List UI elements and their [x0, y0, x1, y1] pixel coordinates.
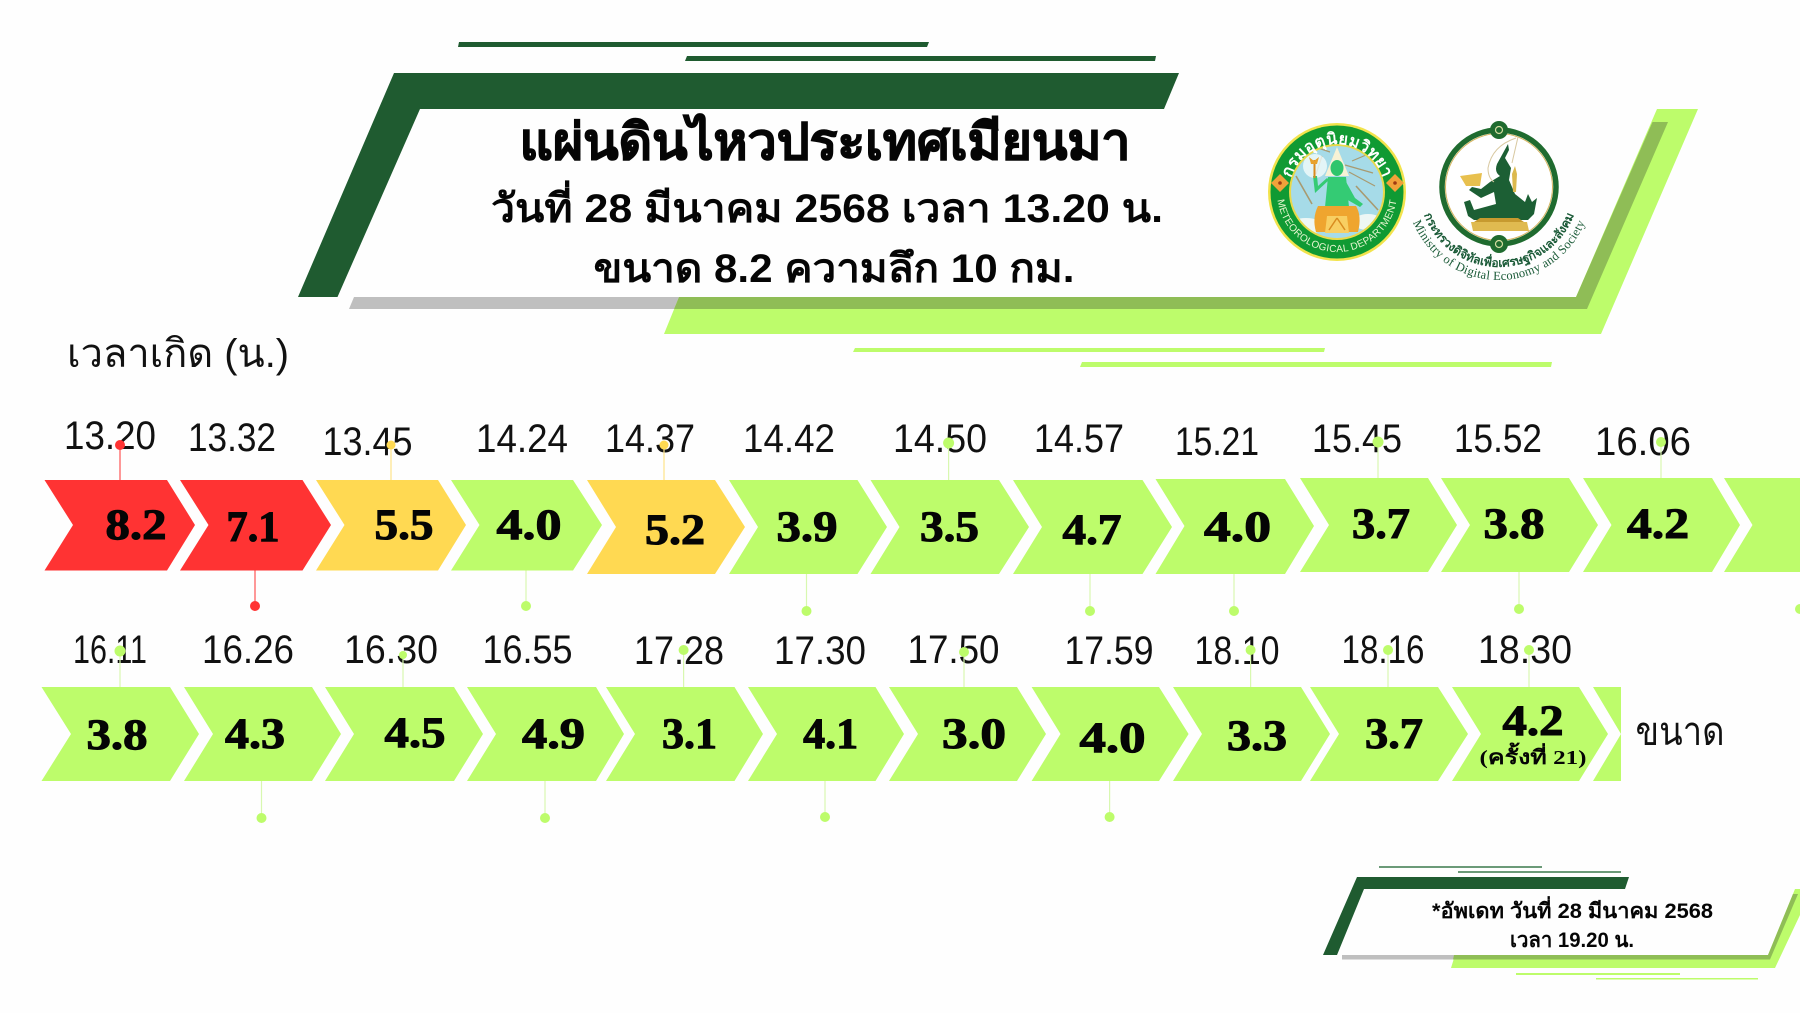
chevron 3.8 — [1441, 478, 1598, 572]
chevron 8.2 — [44, 480, 195, 570]
marker 13.32: 13.32 — [188, 416, 276, 460]
marker 14.50 — [893, 417, 987, 480]
arc text Thai: กรมอุตุนิยมวิทยา — [1284, 131, 1390, 177]
rosettes — [1271, 174, 1404, 192]
chevron 4.3: 4.3 — [225, 711, 285, 758]
chevron 3.3 — [1173, 687, 1330, 781]
marker 16.11: 16.11 — [73, 628, 147, 672]
axis label: time of occurrence: เวลาเกิด (น.) — [67, 332, 289, 376]
marker 14.42: 14.42 — [743, 417, 835, 461]
marker 14.24 — [476, 417, 568, 611]
arc text Thai: กระทรวงดิจิทัลเพื่อเศรษฐกิจและสังคม — [1424, 213, 1574, 268]
logo: Meteorological Department — [1268, 123, 1406, 261]
axis label: magnitude: ขนาด — [1636, 710, 1724, 754]
marker 17.59 — [1064, 629, 1154, 822]
chevron 3.5: 3.5 — [920, 504, 979, 551]
chevron 4.7 — [1013, 480, 1172, 574]
chevron 4.5 — [325, 687, 483, 781]
chevron 3.5 — [870, 480, 1029, 574]
marker 17.59: 17.59 — [1064, 629, 1154, 673]
arc text English: Ministry of Digital Economy and Society — [1412, 219, 1586, 280]
sky rays and clouds — [1295, 148, 1378, 233]
marker 16.26 — [202, 628, 294, 823]
footer light lines — [1516, 973, 1758, 980]
logo: Ministry of Digital Economy and Society — [1412, 121, 1586, 280]
chevron 4.2 final event: 4.2 — [1502, 698, 1564, 745]
marker 17.28: 17.28 — [634, 629, 724, 673]
chevron 4.2 — [1583, 478, 1740, 572]
chevron 3.1: 3.1 — [662, 711, 717, 758]
chevron 3.9: 3.9 — [776, 504, 838, 551]
chevron 5.5: 5.5 — [374, 502, 434, 549]
header banner — [298, 42, 1698, 367]
marker 13.45 — [322, 420, 412, 480]
marker 14.37 — [605, 417, 695, 480]
chevron 3.0: 3.0 — [942, 711, 1006, 758]
chevron 4.2 final event — [1452, 687, 1608, 781]
marker 18.10: 18.10 — [1194, 629, 1280, 673]
chevron 3.7: 3.7 — [1352, 501, 1410, 548]
chevron 3.8 — [42, 687, 199, 781]
subtitle magnitude and depth: ขนาด 8.2 ความลึก 10 กม. — [594, 247, 1074, 291]
title: แผ่นดินไหวประเทศเมียนมา — [520, 113, 1130, 170]
marker 13.20: 13.20 — [64, 414, 156, 458]
chevron 4.9: 4.9 — [522, 711, 585, 758]
marker 17.50: 17.50 — [908, 628, 1000, 672]
chevron 3.7: 3.7 — [1365, 711, 1423, 758]
marker 13.20 — [64, 414, 156, 480]
marker 14.50: 14.50 — [893, 417, 987, 461]
marker 14.57: 14.57 — [1034, 417, 1124, 461]
marker 15.52 — [1454, 417, 1542, 614]
marker 15.45: 15.45 — [1312, 417, 1402, 461]
marker 18.16: 18.16 — [1342, 628, 1424, 672]
marker 18.10 — [1194, 629, 1280, 687]
marker 13.32 — [188, 416, 276, 611]
chevron 3.9 — [729, 480, 887, 574]
marker 16.55: 16.55 — [482, 628, 572, 672]
marker 16.55 — [482, 628, 572, 823]
lower light accent lines — [853, 348, 1552, 367]
dark green frame — [298, 73, 1179, 297]
update note — [1432, 895, 1713, 952]
chevron clipped continuation — [1724, 478, 1800, 614]
chevron 4.1: 4.1 — [803, 711, 858, 758]
arc text English: METEOROLOGICAL DEPARTMENT — [1278, 199, 1396, 252]
marker 15.21 — [1175, 420, 1259, 616]
chevron 3.8: 3.8 — [86, 712, 148, 759]
title — [491, 113, 1163, 291]
footer medium frame — [1453, 894, 1798, 960]
chevron 5.2 — [587, 480, 745, 574]
chevron 4.9 — [467, 687, 624, 781]
chevron 4.7: 4.7 — [1062, 507, 1122, 554]
chevron 3.0 — [889, 687, 1046, 781]
update note: เวลา 19.20 น. — [1510, 929, 1634, 952]
chevron 8.2: 8.2 — [106, 502, 166, 549]
chevron 4.0: 4.0 — [496, 502, 562, 549]
chevron 3.7 — [1310, 687, 1468, 781]
light green frame — [664, 109, 1698, 334]
marker 15.45 — [1312, 417, 1402, 478]
marker 16.30: 16.30 — [344, 628, 438, 672]
chevron 4.0: 4.0 — [1080, 715, 1146, 762]
chevron 7.1: 7.1 — [226, 504, 280, 551]
chevron end cap — [1593, 687, 1621, 781]
medium green frame — [674, 122, 1668, 309]
chevron 3.8: 3.8 — [1484, 501, 1544, 548]
ring knots — [1490, 121, 1508, 139]
marker 15.21: 15.21 — [1175, 420, 1259, 464]
chevron 3.1 — [606, 687, 763, 781]
chevron 4.2 final event: (ครั้งที่ 21) — [1480, 742, 1586, 769]
chevron 3.7 — [1300, 478, 1457, 572]
chevron 4.3 — [184, 687, 341, 781]
timeline row 1 — [44, 414, 1800, 616]
marker 16.11 — [73, 628, 147, 687]
update note: *อัพเดท วันที่ 28 มีนาคม 2568 — [1432, 895, 1713, 923]
marker 18.30: 18.30 — [1478, 628, 1572, 672]
grey bar — [349, 297, 679, 309]
marker 15.52: 15.52 — [1454, 417, 1542, 461]
chevron 5.5 — [316, 480, 466, 570]
footer update panel — [1323, 866, 1800, 980]
marker 17.30 — [774, 629, 866, 822]
chevron 4.0: 4.0 — [1204, 504, 1271, 551]
marker 17.30: 17.30 — [774, 629, 866, 673]
timeline row 2 — [42, 628, 1621, 823]
chevron 4.0 — [451, 480, 602, 570]
footer dark frame — [1323, 877, 1629, 955]
chevron 4.2: 4.2 — [1627, 501, 1689, 548]
footer grey bar — [1342, 955, 1455, 960]
marker 16.06: 16.06 — [1595, 420, 1691, 464]
chevron 4.1 — [748, 687, 904, 781]
chevron 4.5: 4.5 — [384, 710, 446, 757]
marker 14.24: 14.24 — [476, 417, 568, 461]
marker 14.57 — [1034, 417, 1124, 616]
marker 14.37: 14.37 — [605, 417, 695, 461]
chevron 7.1 — [180, 480, 331, 570]
chevron 5.2: 5.2 — [645, 507, 705, 554]
deity — [1464, 144, 1537, 220]
marker 13.45: 13.45 — [322, 420, 412, 464]
marker 16.26: 16.26 — [202, 628, 294, 672]
chevron 4.0 — [1156, 479, 1314, 574]
top dark accent lines — [458, 42, 1156, 61]
footer accent lines — [1379, 866, 1621, 873]
marker 14.42 — [743, 417, 835, 616]
footer light frame — [1451, 889, 1800, 968]
subtitle date and time: วันที่ 28 มีนาคม 2568 เวลา 13.20 น. — [491, 180, 1163, 231]
marker 18.16 — [1342, 628, 1424, 687]
chevron 3.3: 3.3 — [1227, 713, 1287, 760]
chevron 4.0 — [1032, 687, 1189, 781]
